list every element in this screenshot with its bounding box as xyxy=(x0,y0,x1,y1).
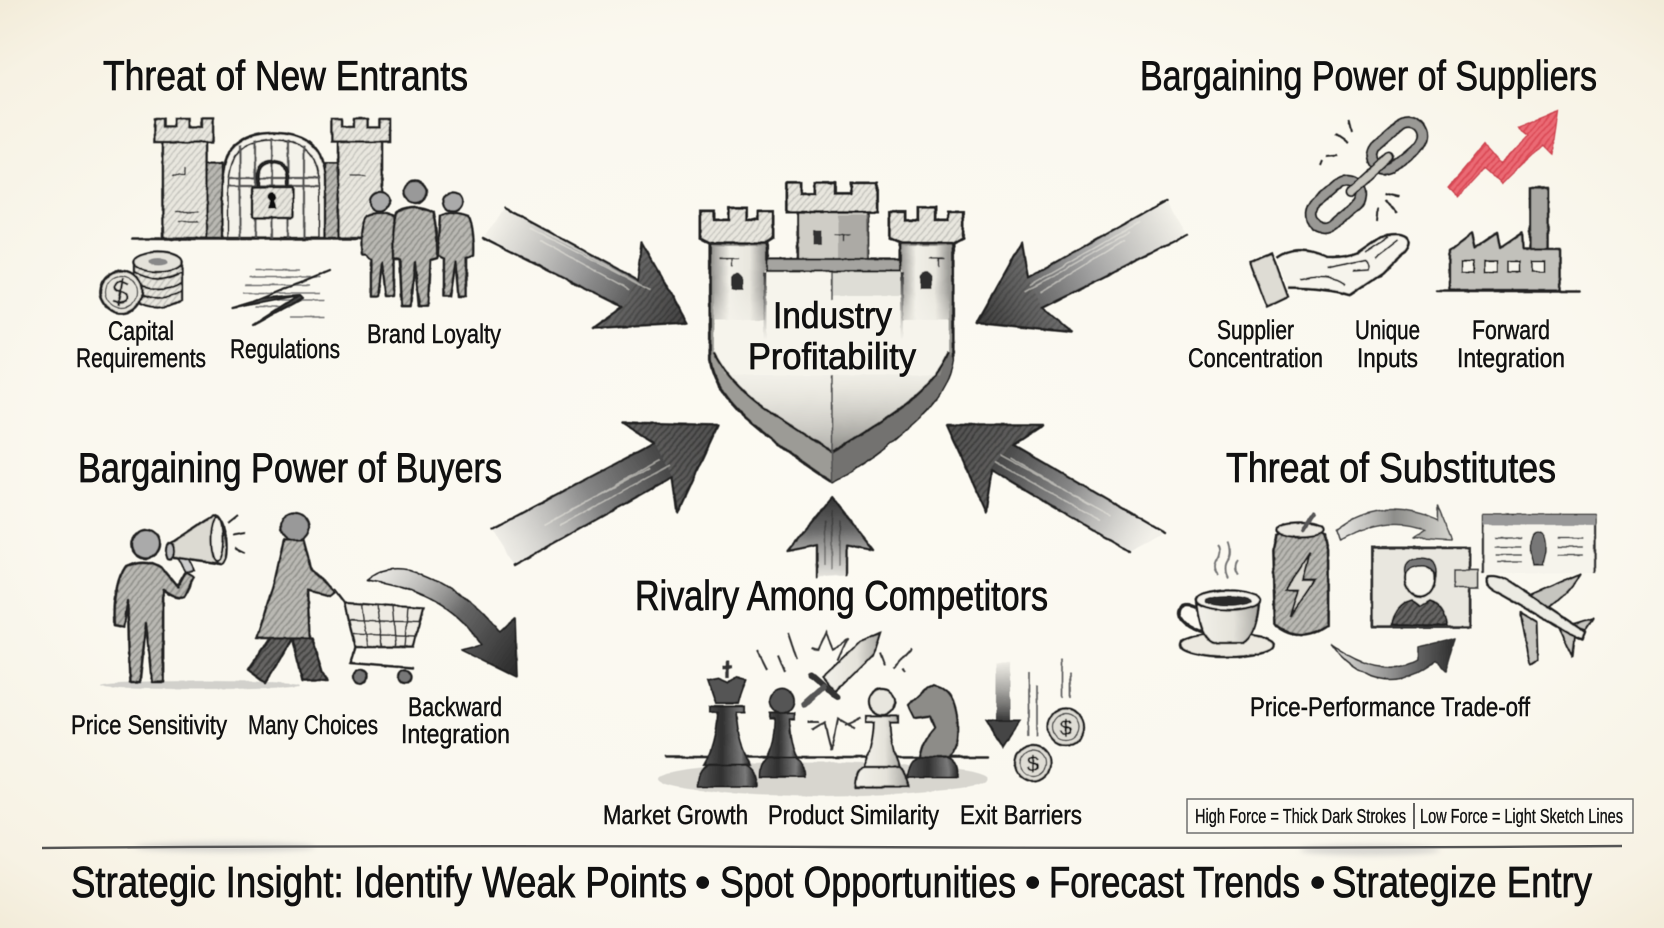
icon: rising red arrow xyxy=(1448,111,1558,197)
labels: Backward xyxy=(408,692,502,722)
label: Price-Performance Trade-off xyxy=(1250,692,1530,722)
icon: falling arrow and coins xyxy=(987,658,1084,781)
icon: coffee cup xyxy=(1179,542,1274,657)
labels: Supplier xyxy=(1217,315,1294,345)
panel: threat of new entrants xyxy=(76,52,501,373)
labels: Unique xyxy=(1355,315,1420,345)
labels: Market Growth xyxy=(603,800,748,830)
labels: Inputs xyxy=(1357,343,1418,373)
panel: threat of substitutes xyxy=(1179,444,1595,722)
icon: falling arrow and coins: $ xyxy=(1060,717,1072,740)
legend: High Force = Thick Dark Strokes xyxy=(1195,806,1406,828)
centre title: Industry xyxy=(773,295,892,336)
heading: Bargaining Power of Buyers xyxy=(78,444,502,491)
icon: video call frame xyxy=(1372,548,1478,627)
strategic insight footer: Forecast Trends xyxy=(1049,858,1300,907)
force arrow: substitutes to centre xyxy=(947,425,1165,552)
force arrow: buyers to centre xyxy=(492,423,718,565)
strategic insight footer: • xyxy=(695,858,710,907)
labels: Many Choices xyxy=(248,710,378,740)
icon: web page xyxy=(1483,515,1595,573)
labels: Brand Loyalty xyxy=(367,319,501,349)
panel: industry profitability castle shield xyxy=(700,183,963,482)
labels: Product Similarity xyxy=(768,800,939,830)
icon: regulations lightning xyxy=(232,270,330,325)
icon: coin stack xyxy=(100,252,182,313)
icon: castle shield xyxy=(700,183,963,482)
labels: Regulations xyxy=(230,334,340,364)
labels: Exit Barriers xyxy=(960,800,1082,830)
strategic insight footer: Spot Opportunities xyxy=(720,858,1016,907)
strategic insight footer: Strategize Entry xyxy=(1332,858,1592,907)
icon: energy drink can xyxy=(1273,515,1328,635)
centre title xyxy=(748,295,916,377)
strategic insight footer: • xyxy=(1025,858,1040,907)
bottom divider xyxy=(42,842,1622,855)
icon: loyal customers xyxy=(362,181,473,306)
heading: Threat of New Entrants xyxy=(103,52,468,99)
icon: shopper xyxy=(248,513,335,683)
icon: upper cycle arrow xyxy=(1337,505,1452,540)
icon: open hand xyxy=(1250,235,1408,307)
heading: Threat of Substitutes xyxy=(1226,444,1556,491)
force arrow: rivalry to centre xyxy=(788,497,873,577)
strategic insight footer: • xyxy=(1310,858,1325,907)
labels: Forward xyxy=(1472,315,1550,345)
panel: bargaining power of suppliers xyxy=(1140,52,1597,373)
labels xyxy=(71,692,510,749)
icon: curved downward arrow xyxy=(367,569,517,677)
strategic insight footer: Strategic Insight: Identify Weak Points xyxy=(71,858,687,907)
labels: Integration xyxy=(1457,343,1565,373)
labels: Requirements xyxy=(76,343,206,373)
labels xyxy=(603,800,1082,830)
icon: breaking chain xyxy=(1305,116,1428,234)
heading: Rivalry Among Competitors xyxy=(635,572,1048,619)
labels xyxy=(76,316,501,373)
force arrow: new entrants to centre xyxy=(483,208,687,328)
icon: shopping cart xyxy=(335,590,423,684)
force arrow: suppliers to centre xyxy=(977,200,1187,332)
icon: airplane xyxy=(1486,574,1593,665)
icon: locked castle gate xyxy=(132,119,390,239)
panel: bargaining power of buyers xyxy=(71,444,517,749)
labels xyxy=(1188,315,1565,373)
labels: Price Sensitivity xyxy=(71,710,227,740)
icon: factory xyxy=(1437,188,1580,291)
legend xyxy=(1187,799,1633,833)
centre title: Profitability xyxy=(748,336,916,377)
icon: lower cycle arrow xyxy=(1332,638,1455,679)
labels: Concentration xyxy=(1188,343,1323,373)
labels: Integration xyxy=(401,719,510,749)
icon: chess scene with sword xyxy=(658,633,988,796)
labels: Capital xyxy=(108,316,174,346)
icon: person with megaphone xyxy=(100,515,300,689)
icon: falling arrow and coins: $ xyxy=(1027,753,1039,776)
panel: rivalry among competitors xyxy=(603,572,1084,830)
strategic insight footer xyxy=(71,858,1592,907)
